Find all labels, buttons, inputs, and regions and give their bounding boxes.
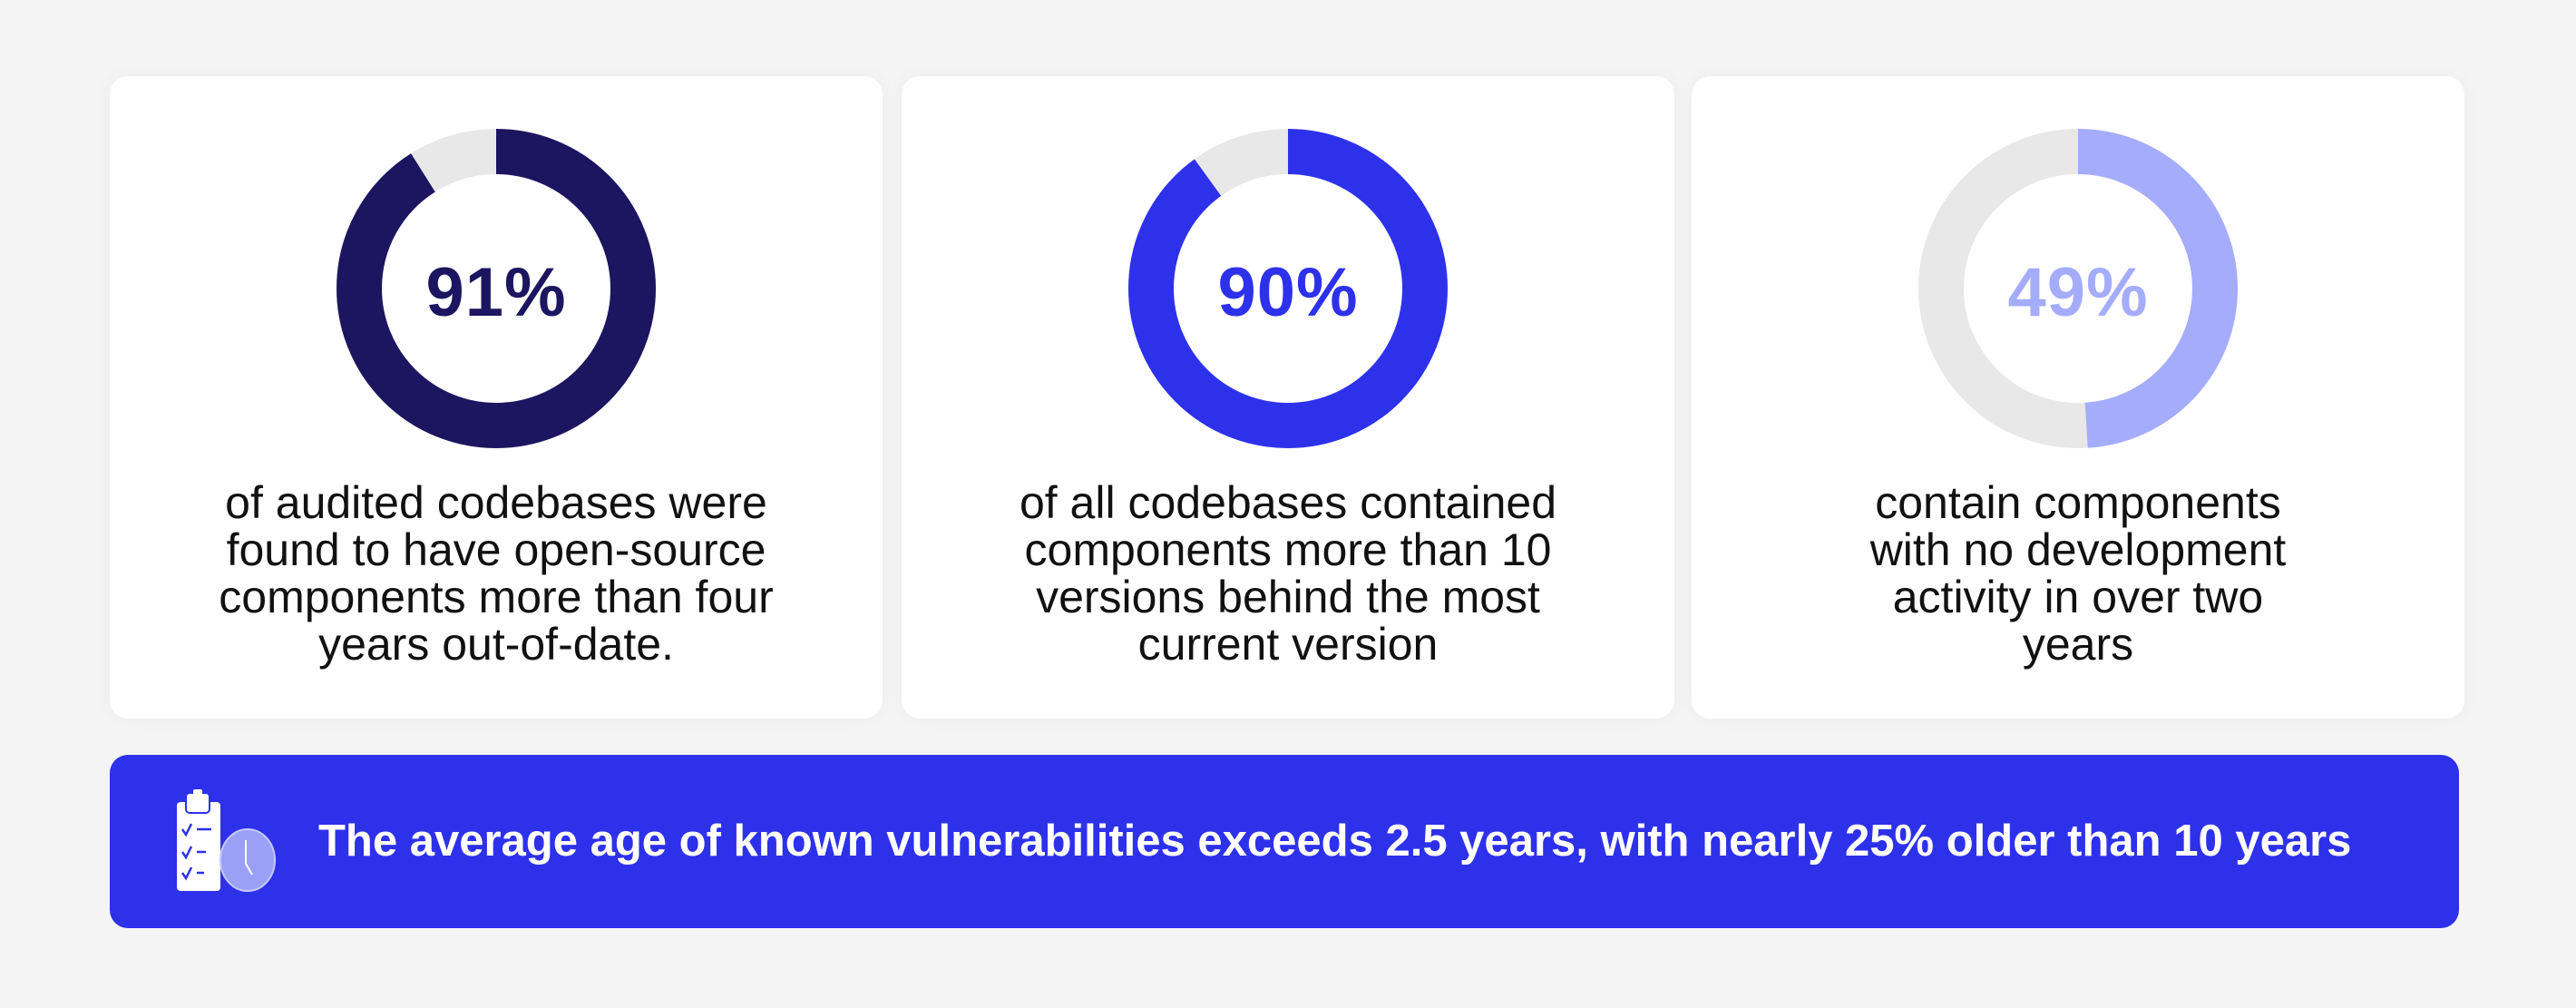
description: contain components [1875,477,2281,528]
description [219,477,774,670]
donut chart 49% [1918,129,2238,448]
description: of all codebases contained [1020,477,1556,528]
description: components more than four [219,572,774,622]
panel: 90% versions behind [902,76,1674,719]
description: years [2023,619,2133,670]
icon: clipboard with clock [177,789,276,892]
description [1020,477,1556,670]
banner: vulnerability age [110,755,2459,928]
banner text: The average age of known vulnerabilities exceeds 2.5 years, with nearly 25% older than 10 years [318,817,2351,866]
description: years out-of-date. [318,619,674,670]
description: found to have open-source [227,524,766,575]
panel: 91% outdated components [110,76,883,719]
donut chart 90% [1128,129,1448,448]
description: components more than 10 [1025,524,1551,575]
description [1870,477,2286,670]
description: with no development [1870,524,2286,575]
panel: 49% no development activity [1692,76,2464,719]
description: activity in over two [1893,572,2263,622]
description: versions behind the most [1036,572,1540,622]
donut chart 91% [337,129,656,448]
stat 90%: 90% [1217,254,1359,331]
description: current version [1138,619,1438,670]
stat 91%: 91% [425,254,567,331]
description: of audited codebases were [225,477,767,528]
stat 49%: 49% [2007,254,2149,331]
